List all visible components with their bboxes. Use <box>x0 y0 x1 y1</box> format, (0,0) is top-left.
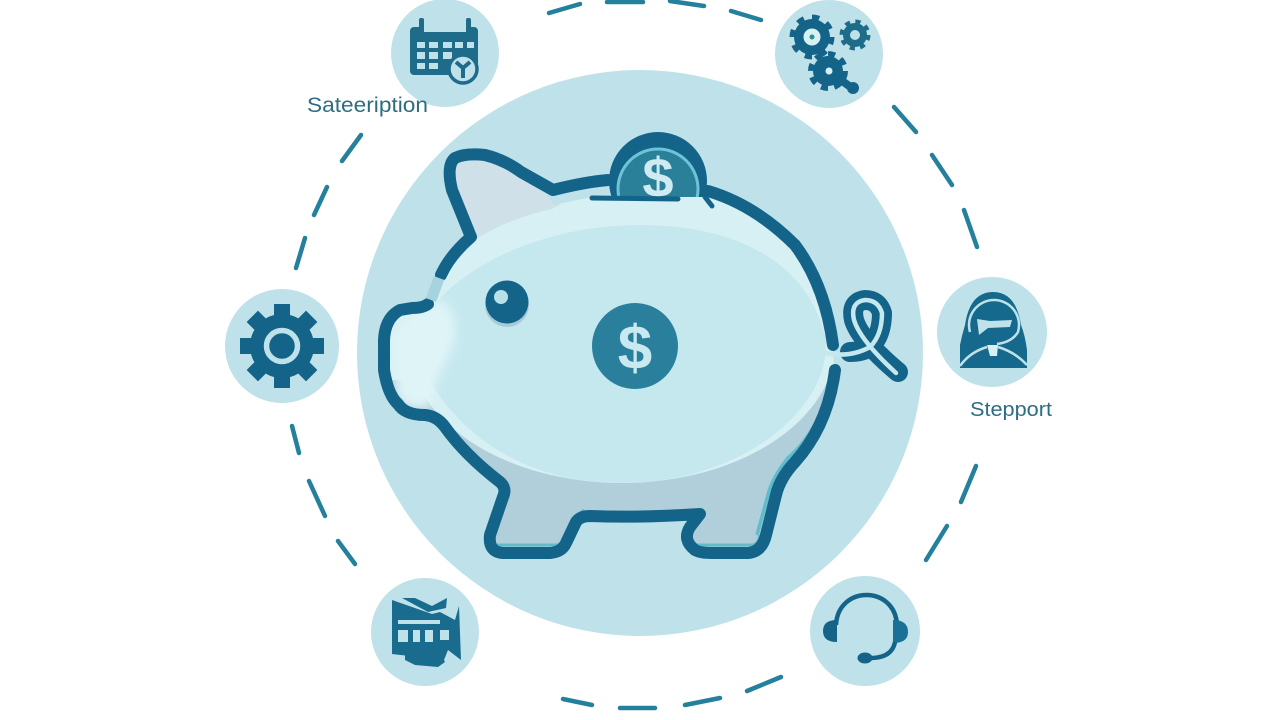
coin in slot <box>609 132 707 197</box>
label: support: Stepport <box>970 399 1052 421</box>
pale outline gap <box>431 278 439 300</box>
icon: calendar <box>391 0 499 107</box>
tail highlight <box>826 300 896 373</box>
icon: abstract glyph <box>371 578 479 686</box>
eye <box>485 280 529 327</box>
curly tail <box>850 300 898 372</box>
piggy bank <box>370 132 898 570</box>
icon: support agent <box>937 277 1047 387</box>
label: subscription: Sateeription <box>307 94 428 117</box>
icon: gears cluster <box>775 0 883 108</box>
coin in slot: $ <box>642 146 674 209</box>
center dollar badge: $ <box>618 314 652 383</box>
icon: headset <box>810 576 920 686</box>
pig body fill <box>390 160 834 547</box>
pig outline <box>384 154 835 553</box>
center dollar badge <box>592 303 678 389</box>
icon: settings gear <box>225 289 339 403</box>
coin slot <box>592 197 712 206</box>
background circle <box>357 70 923 636</box>
dashed ring <box>292 1 977 708</box>
